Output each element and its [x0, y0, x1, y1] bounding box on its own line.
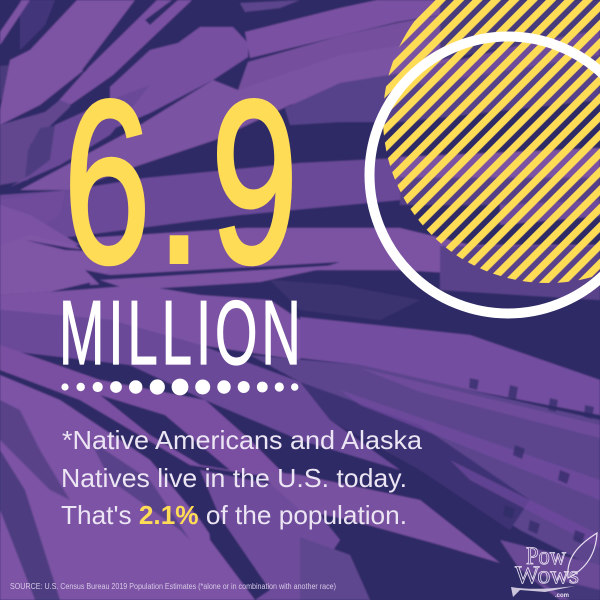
logo: PowWows.com: .com — [555, 593, 569, 599]
big number: 6.9 — [64, 53, 298, 312]
logo: PowWows.com — [511, 533, 597, 599]
striped yellow circle — [370, 0, 600, 290]
logo: PowWows.com: Pow — [526, 543, 566, 570]
description text — [61, 425, 423, 530]
big number: 6.9: . — [156, 53, 202, 312]
big number: 6.9: 6 — [64, 53, 150, 312]
white ring — [370, 36, 600, 314]
source note: SOURCE: U.S. Census Bureau 2019 Population Estimates (*alone or in combination with another race) — [10, 582, 336, 591]
description text: That's 2.1% of the population. — [61, 500, 407, 530]
dotted divider — [61, 379, 298, 395]
description text: Natives live in the U.S. today. — [61, 463, 407, 493]
striped feathers — [250, 355, 600, 570]
right feather — [300, 317, 600, 415]
big number: 6.9: 9 — [211, 53, 298, 312]
logo: PowWows.com: Wows — [515, 562, 579, 589]
lower-left purple feathers — [0, 310, 400, 470]
middle-band feathers — [0, 148, 600, 245]
upper-left feathers — [20, 0, 55, 50]
heading: MILLION: MILLION — [59, 282, 301, 383]
description text: *Native Americans and Alaska — [62, 425, 423, 455]
